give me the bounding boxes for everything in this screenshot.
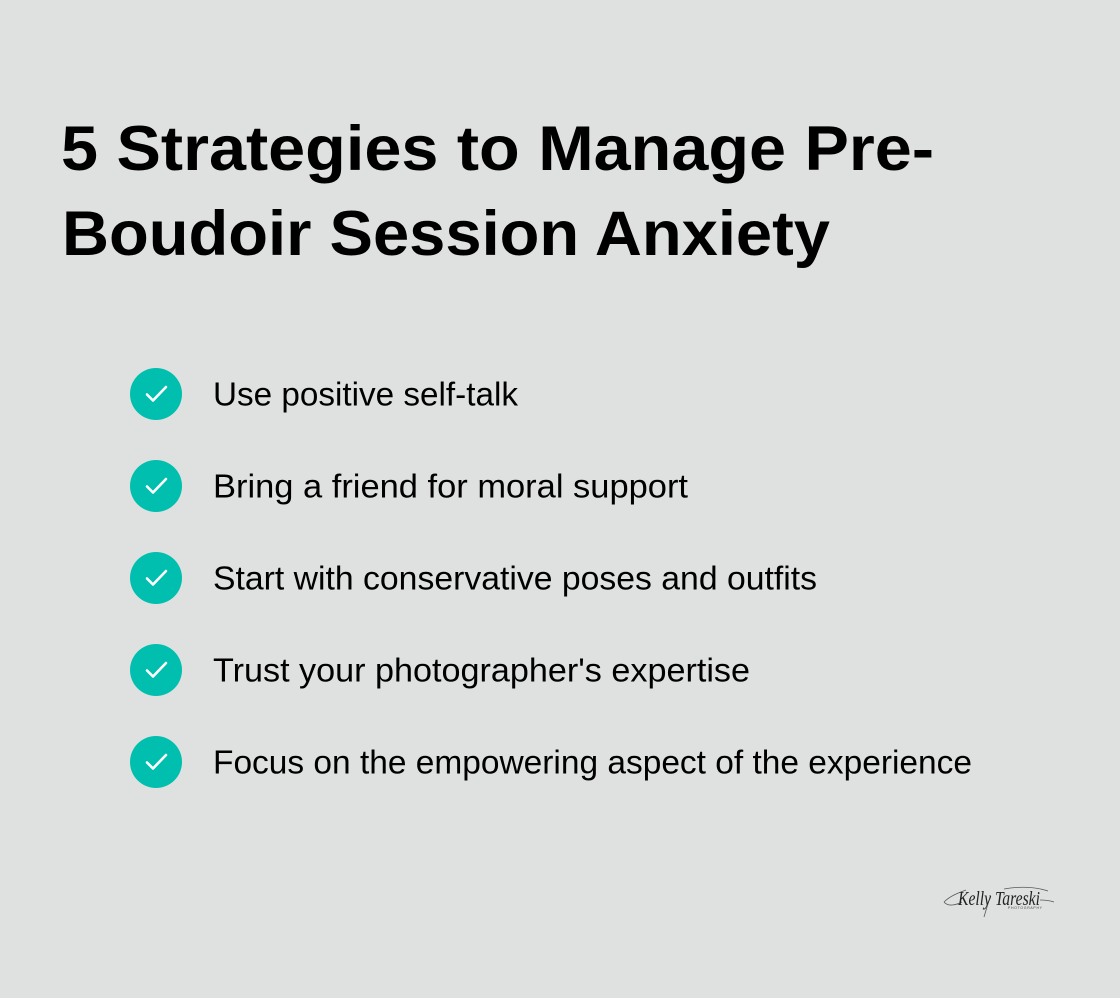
title: Boudoir Session Anxiety (62, 199, 830, 269)
item: start with conservative poses: Start with conservative poses and outfits (213, 560, 817, 596)
item: bring a friend (130, 460, 688, 512)
title: 5 Strategies to Manage Pre- (61, 114, 934, 184)
title (61, 114, 934, 269)
signature logo: Kelly Tareski (957, 888, 1040, 910)
item: trust your photographer (130, 644, 750, 696)
item: use positive self-talk: Use positive self-talk (213, 376, 519, 412)
item: trust your photographer: Trust your photographer's expertise (213, 652, 750, 688)
signature logo: PHOTOGRAPHY (1008, 906, 1043, 910)
item: focus on empowering aspect: Focus on the empowering aspect of the experience (213, 744, 972, 780)
checklist (130, 368, 972, 788)
item: use positive self-talk (130, 368, 519, 420)
item: start with conservative poses (130, 552, 817, 604)
item: focus on empowering aspect (130, 736, 972, 788)
signature logo (944, 887, 1054, 917)
item: bring a friend: Bring a friend for moral support (213, 468, 688, 504)
